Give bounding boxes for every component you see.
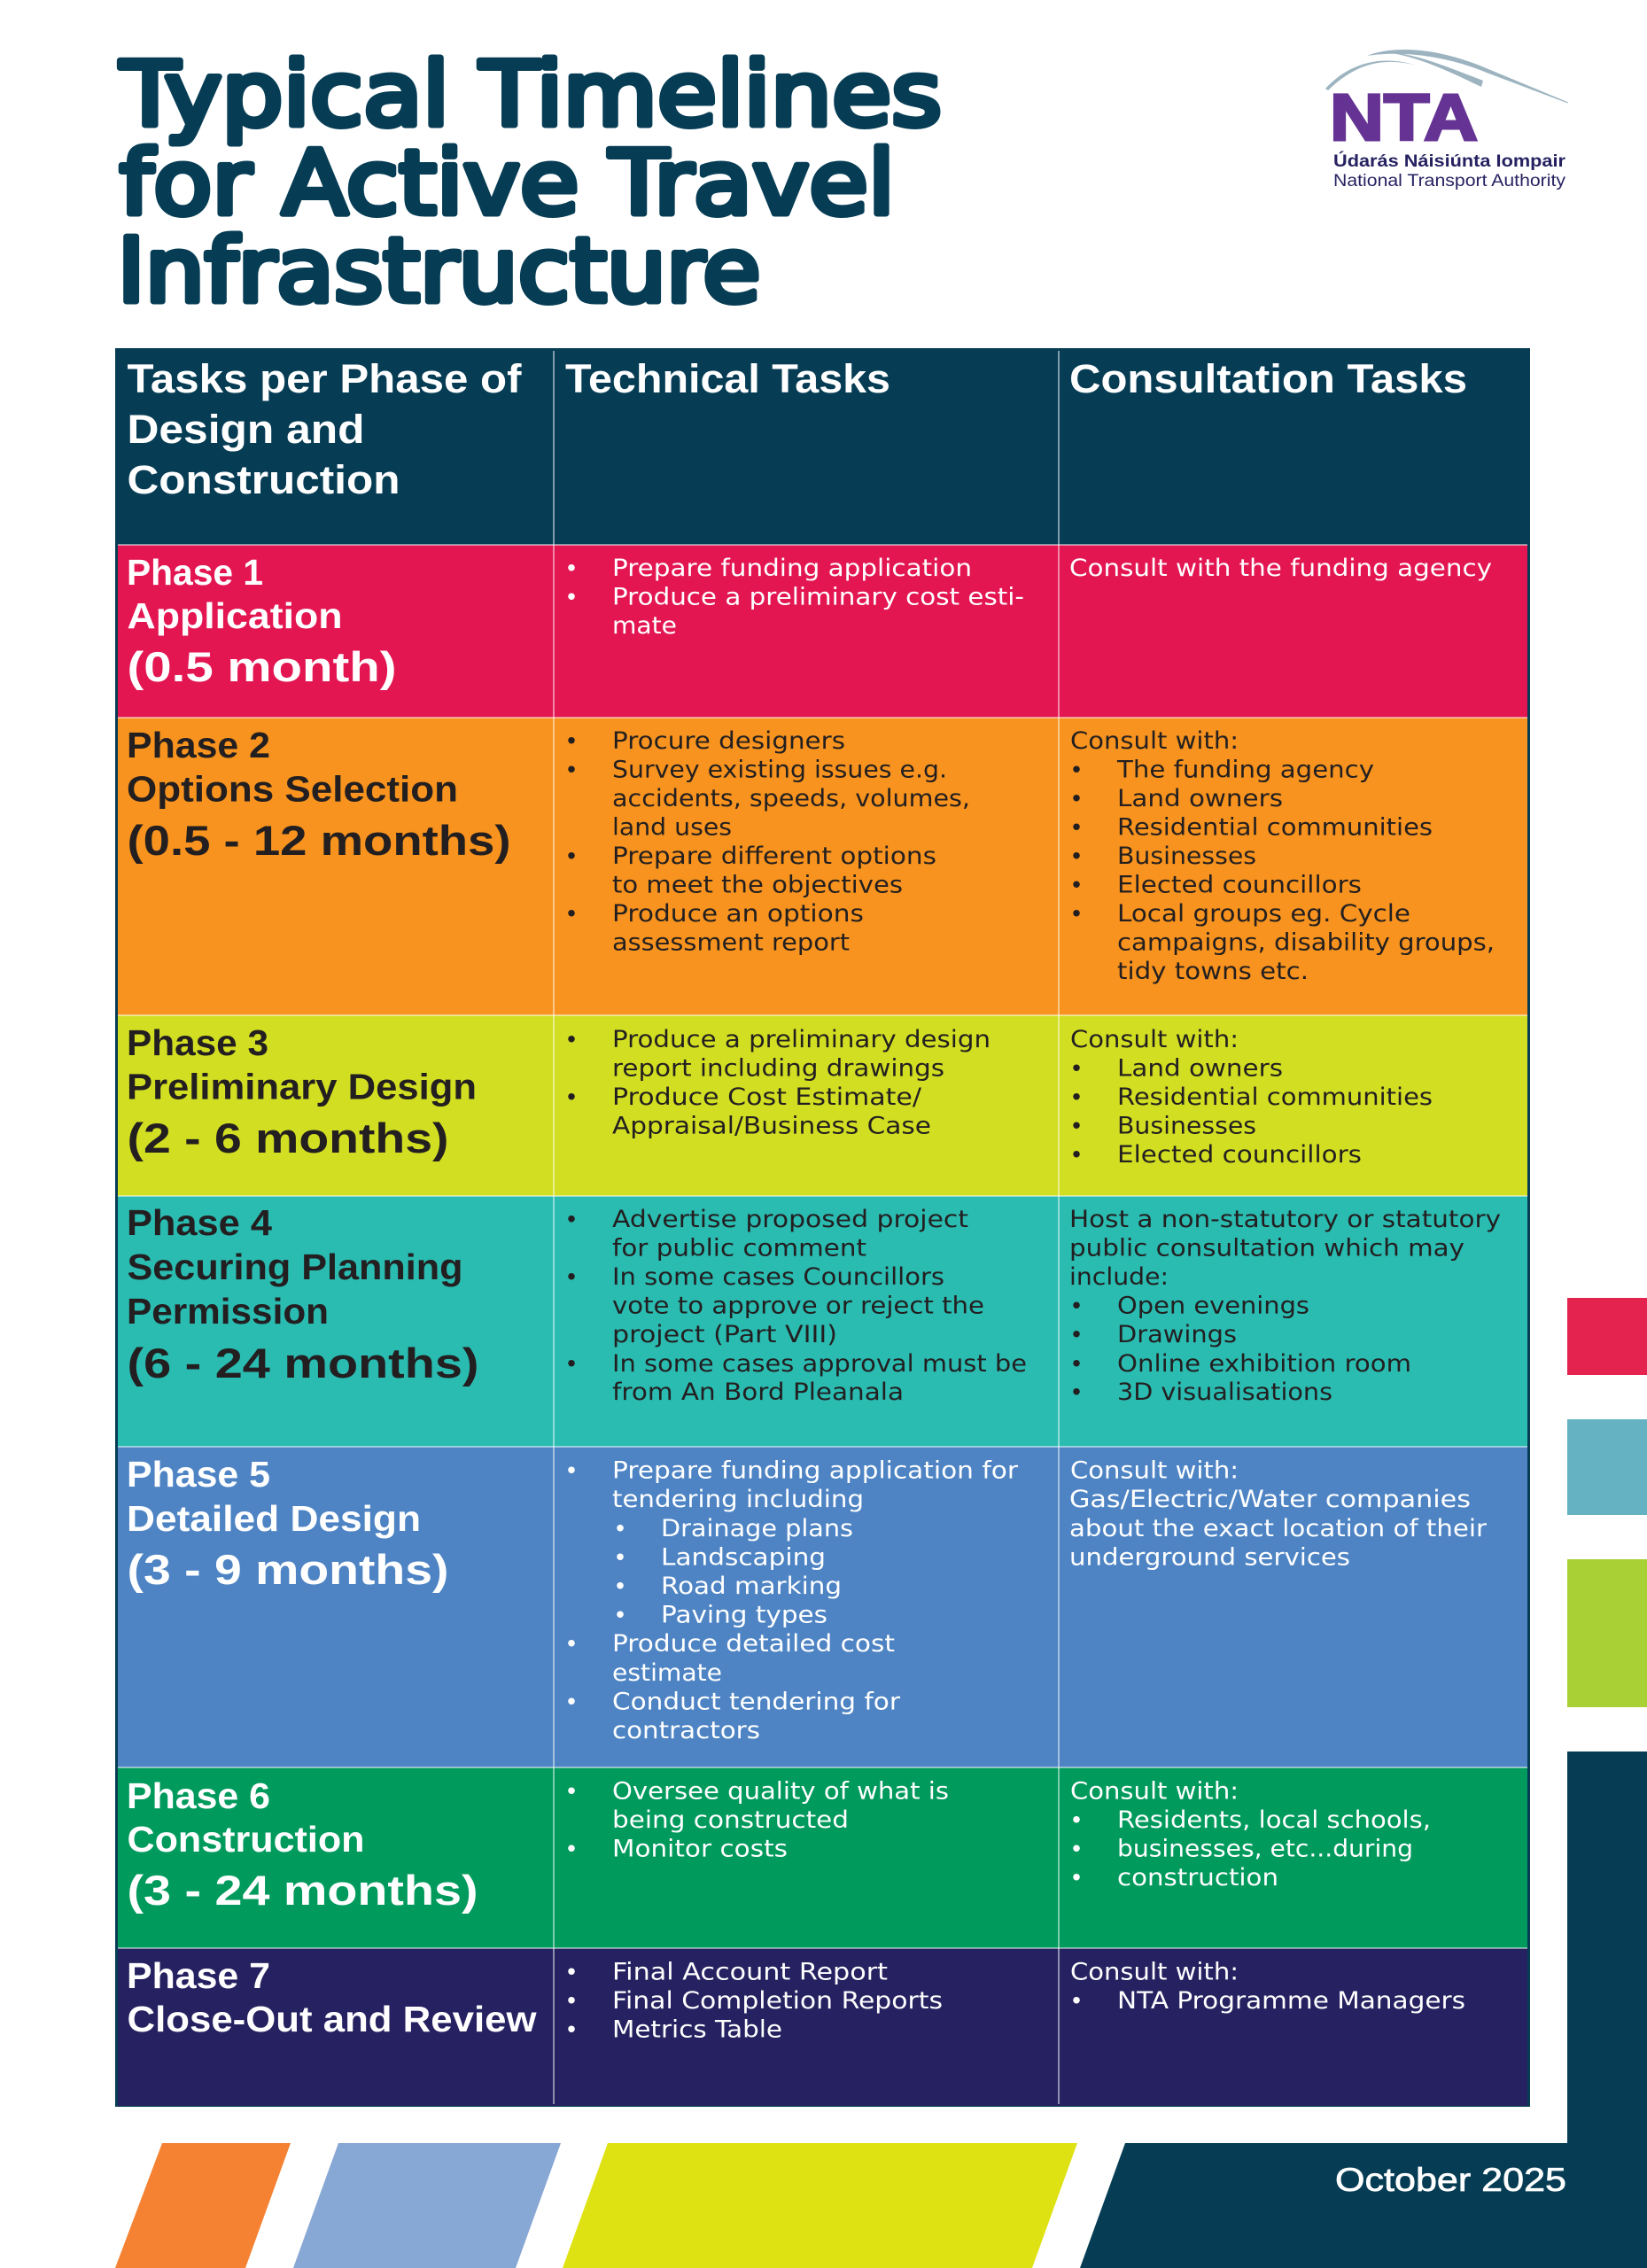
side colour blocks [1567, 1298, 1647, 1707]
phase 7 technical tasks: • [567, 1958, 576, 1984]
phase 2 consultation tasks: • [1072, 870, 1081, 897]
phase 2 technical tasks: Produce an options [612, 900, 864, 928]
panel: phase 1 [118, 545, 1527, 718]
phase 6 technical tasks [567, 1777, 949, 1862]
phase 2 consultation tasks: campaigns, disability groups, [1117, 928, 1495, 956]
phase 6 consultation tasks: • [1072, 1863, 1081, 1891]
phase 3 technical tasks: • [567, 1083, 576, 1110]
phase 2 technical tasks: to meet the objectives [612, 871, 903, 898]
title: Typical Timelines [120, 43, 942, 146]
heading: tasks per phase [128, 356, 523, 502]
phase 1 technical tasks: mate [612, 612, 677, 640]
phase 5 technical tasks: Drainage plans [661, 1515, 853, 1542]
phase 7 technical tasks: • [567, 2015, 576, 2043]
phase 1 consultation tasks: Consult with the funding agency [1069, 555, 1492, 582]
phase 5 technical tasks: • [567, 1456, 576, 1484]
phase 4 consultation tasks: • [1072, 1320, 1081, 1348]
phase 4 consultation tasks: Host a non-statutory or statutory [1069, 1206, 1501, 1233]
phase 4 technical tasks: for public comment [612, 1235, 866, 1262]
phase 7 consultation tasks: • [1072, 1986, 1081, 2014]
phase 6 label [127, 1775, 478, 1914]
phase 6 consultation tasks: Consult with: [1070, 1777, 1239, 1806]
logo: NTA: National Transport Authority [1333, 172, 1566, 190]
phase 1 label [127, 552, 397, 690]
phase 1 label: Phase 1 [127, 552, 263, 593]
phase 3 consultation tasks [1070, 1026, 1433, 1169]
phase 7 technical tasks: • [567, 1986, 576, 2014]
phase 6 consultation tasks: • [1072, 1806, 1081, 1833]
phase 2 technical tasks: land uses [612, 813, 732, 841]
phase 6 technical tasks: • [567, 1834, 576, 1862]
panel: phase 3 [118, 1015, 1527, 1196]
phase 1 label: (0.5 month) [128, 643, 397, 690]
phase 4 label: (6 - 24 months) [128, 1340, 478, 1386]
phase 3 consultation tasks: • [1072, 1111, 1081, 1139]
phase 1 technical tasks: • [567, 554, 576, 581]
phase 3 consultation tasks: Businesses [1117, 1113, 1256, 1139]
phase 5 technical tasks: • [567, 1629, 576, 1657]
heading: tasks per phase: Construction [128, 457, 400, 502]
phase 3 label: Preliminary Design [127, 1067, 477, 1107]
phase 4 technical tasks: • [567, 1205, 576, 1232]
phase 3 technical tasks: Produce Cost Estimate/ [612, 1084, 922, 1111]
phase 4 consultation tasks: Online exhibition room [1117, 1350, 1411, 1378]
phase 3 technical tasks: report including drawings [612, 1054, 944, 1083]
heading: consultation tasks: Consultation Tasks [1069, 356, 1467, 401]
phase 7 label: Close-Out and Review [128, 1999, 537, 2039]
phase 6 consultation tasks [1070, 1777, 1431, 1891]
phase 2 consultation tasks: Land owners [1117, 785, 1283, 812]
phase 1 technical tasks: • [567, 583, 576, 610]
phase 5 technical tasks: • [616, 1542, 625, 1570]
phase 5 consultation tasks: Consult with: [1070, 1457, 1239, 1485]
footer date: October 2025 [1335, 2162, 1566, 2198]
phase 6 consultation tasks: Residents, local schools, [1117, 1806, 1431, 1834]
phase 4 consultation tasks: public consultation which may [1069, 1235, 1464, 1262]
phase 7 technical tasks: Final Completion Reports [612, 1987, 943, 2015]
phase 6 consultation tasks: • [1072, 1834, 1081, 1862]
phase 4 consultation tasks: Open evenings [1117, 1293, 1309, 1320]
phase 2 technical tasks: • [567, 899, 576, 927]
heading: tasks per phase: Tasks per Phase of [128, 356, 523, 401]
phase 4 technical tasks: Advertise proposed project [612, 1206, 968, 1233]
phase 3 consultation tasks: • [1072, 1140, 1081, 1168]
phase 2 technical tasks: Prepare different options [612, 843, 936, 870]
phase 7 technical tasks: Metrics Table [612, 2016, 782, 2043]
phase 4 consultation tasks: Drawings [1117, 1321, 1237, 1348]
phase 4 technical tasks: vote to approve or reject the [612, 1293, 984, 1320]
phase 5 technical tasks: • [567, 1687, 576, 1714]
phase 6 label: Construction [128, 1819, 365, 1860]
phase 5 technical tasks: • [616, 1601, 625, 1628]
phase 7 technical tasks: Final Account Report [612, 1958, 888, 1986]
phase 6 label: Phase 6 [127, 1775, 270, 1816]
phase 7 label [127, 1955, 537, 2039]
phase 2 consultation tasks: The funding agency [1116, 757, 1374, 784]
phase 5 technical tasks: • [616, 1572, 625, 1599]
phase 2 consultation tasks: Local groups eg. Cycle [1117, 900, 1410, 928]
phase 4 label: Permission [127, 1291, 329, 1332]
phase 2 consultation tasks: • [1072, 756, 1081, 783]
title: Infrastructure [117, 219, 760, 322]
phase 5 technical tasks: tendering including [612, 1486, 864, 1513]
phase 3 consultation tasks: Elected councillors [1117, 1141, 1362, 1169]
phase 3 consultation tasks: • [1072, 1054, 1081, 1081]
phase 2 technical tasks: • [567, 842, 576, 869]
phase 4 technical tasks: • [567, 1262, 576, 1290]
phase 2 consultation tasks: Consult with: [1070, 727, 1239, 755]
phase 3 consultation tasks: Consult with: [1070, 1026, 1239, 1053]
phase 5 label: Detailed Design [127, 1498, 421, 1539]
phase 3 label: (2 - 6 months) [128, 1115, 448, 1161]
logo: NTA [1325, 50, 1568, 190]
phase 2 technical tasks: Procure designers [612, 727, 845, 755]
phase 5 technical tasks: Landscaping [661, 1543, 826, 1571]
phase 1 technical tasks: Prepare funding application [612, 555, 972, 582]
phase 4 label: Securing Planning [128, 1247, 462, 1287]
phase 4 technical tasks: In some cases approval must be [612, 1350, 1027, 1378]
phase 2 technical tasks: • [567, 726, 576, 754]
phase 4 consultation tasks: • [1072, 1378, 1081, 1405]
panel: phase 6 [118, 1767, 1527, 1948]
phase 5 technical tasks: Conduct tendering for [612, 1688, 901, 1715]
heading: tasks per phase: Design and [128, 407, 365, 452]
phase 1 label: Application [128, 595, 342, 636]
phase 6 technical tasks: Monitor costs [612, 1836, 788, 1862]
phase 4 consultation tasks: include: [1069, 1263, 1169, 1291]
phase 2 consultation tasks [1070, 727, 1495, 985]
phase 2 technical tasks [567, 726, 970, 956]
phase 3 technical tasks: Appraisal/Business Case [612, 1113, 931, 1139]
phase 3 technical tasks: • [567, 1025, 576, 1052]
phase 4 consultation tasks: • [1072, 1349, 1081, 1377]
phase 3 technical tasks [567, 1025, 991, 1139]
phase 7 label: Phase 7 [127, 1955, 270, 1996]
phase 6 consultation tasks: businesses, etc...during [1117, 1836, 1413, 1862]
title [117, 43, 942, 322]
phase 2 consultation tasks: • [1072, 812, 1081, 840]
phase 7 technical tasks [567, 1958, 943, 2043]
phase 2 consultation tasks: Elected councillors [1117, 871, 1362, 898]
phase 5 technical tasks: • [616, 1514, 625, 1542]
table frame [115, 348, 1530, 2107]
phase 2 label: Phase 2 [127, 725, 270, 765]
phase 3 consultation tasks: Residential communities [1117, 1084, 1433, 1111]
phase 5 label [127, 1454, 448, 1593]
panel: phase 7 [118, 1948, 1527, 2106]
panel: table header [128, 356, 1467, 502]
phase 5 label: Phase 5 [127, 1454, 270, 1495]
phase 5 consultation tasks: Gas/Electric/Water companies [1069, 1486, 1471, 1513]
phase 2 consultation tasks: • [1072, 842, 1081, 869]
phase 6 technical tasks: • [567, 1777, 576, 1804]
phase 3 technical tasks: Produce a preliminary design [612, 1026, 991, 1053]
phase 5 label: (3 - 9 months) [128, 1546, 448, 1593]
phase 2 technical tasks: • [567, 756, 576, 783]
phase 1 technical tasks [567, 554, 1024, 640]
phase 2 consultation tasks: Businesses [1117, 843, 1256, 870]
phase 2 label: Options Selection [127, 769, 458, 810]
phase 2 consultation tasks: tidy towns etc. [1117, 958, 1309, 985]
phase 7 consultation tasks: NTA Programme Managers [1117, 1987, 1465, 2015]
phase 6 technical tasks: Oversee quality of what is [612, 1777, 949, 1806]
phase 4 consultation tasks: 3D visualisations [1117, 1379, 1332, 1406]
phase 2 consultation tasks: • [1072, 784, 1081, 812]
panel: phase 4 [118, 1196, 1527, 1447]
phase 4 consultation tasks [1069, 1206, 1501, 1406]
phase 3 label: Phase 3 [127, 1022, 268, 1063]
phase 6 label: (3 - 24 months) [128, 1867, 478, 1914]
phase 2 technical tasks: accidents, speeds, volumes, [612, 785, 970, 812]
phase 4 technical tasks: project (Part VIII) [612, 1321, 837, 1348]
title: for Active Travel [120, 131, 895, 235]
logo: NTA: Údarás Náisiúnta Iompair [1333, 151, 1566, 171]
phase 5 consultation tasks: about the exact location of their [1069, 1515, 1488, 1542]
bottom colour parallelograms [115, 2143, 1077, 2268]
phase 5 consultation tasks: underground services [1069, 1543, 1350, 1571]
phase 7 consultation tasks [1070, 1958, 1465, 2015]
phase 2 consultation tasks: • [1072, 899, 1081, 927]
phase 5 technical tasks [567, 1456, 1019, 1744]
footer navy block [1080, 1751, 1647, 2268]
phase 3 consultation tasks: Land owners [1117, 1054, 1283, 1083]
phase 4 label [127, 1202, 478, 1386]
phase 7 consultation tasks: Consult with: [1070, 1958, 1239, 1986]
phase 4 technical tasks [567, 1205, 1027, 1406]
phase 2 label: (0.5 - 12 months) [128, 817, 510, 864]
phase 4 label: Phase 4 [127, 1202, 272, 1243]
heading: technical tasks: Technical Tasks [565, 356, 890, 401]
phase 2 technical tasks: Survey existing issues e.g. [612, 757, 947, 784]
panel: phase 5 [118, 1447, 1527, 1767]
panel: phase 2 [118, 718, 1527, 1015]
phase 1 technical tasks: Produce a preliminary cost esti- [612, 584, 1024, 611]
phase 4 technical tasks: • [567, 1349, 576, 1377]
phase 4 consultation tasks: • [1072, 1292, 1081, 1319]
phase 5 consultation tasks [1069, 1457, 1488, 1571]
phase 2 label [127, 725, 510, 864]
phase 4 technical tasks: from An Bord Pleanala [612, 1379, 904, 1406]
phase 4 technical tasks: In some cases Councillors [612, 1263, 944, 1291]
phase 5 technical tasks: Road marking [661, 1573, 842, 1600]
phase 5 technical tasks: Prepare funding application for [612, 1457, 1019, 1485]
phase 5 technical tasks: contractors [612, 1717, 760, 1744]
phase 2 technical tasks: assessment report [612, 928, 850, 956]
logo: NTA: NTA [1330, 81, 1478, 154]
phase 6 technical tasks: being constructed [612, 1806, 849, 1834]
phase 6 consultation tasks: construction [1117, 1864, 1278, 1891]
phase 3 label [127, 1022, 477, 1161]
phase 5 technical tasks: Produce detailed cost [612, 1630, 895, 1658]
phase 5 technical tasks: Paving types [661, 1602, 827, 1629]
phase 3 consultation tasks: • [1072, 1083, 1081, 1110]
phase 2 consultation tasks: Residential communities [1117, 813, 1433, 841]
icon: road swoosh [1325, 50, 1568, 103]
phase 5 technical tasks: estimate [612, 1659, 722, 1687]
